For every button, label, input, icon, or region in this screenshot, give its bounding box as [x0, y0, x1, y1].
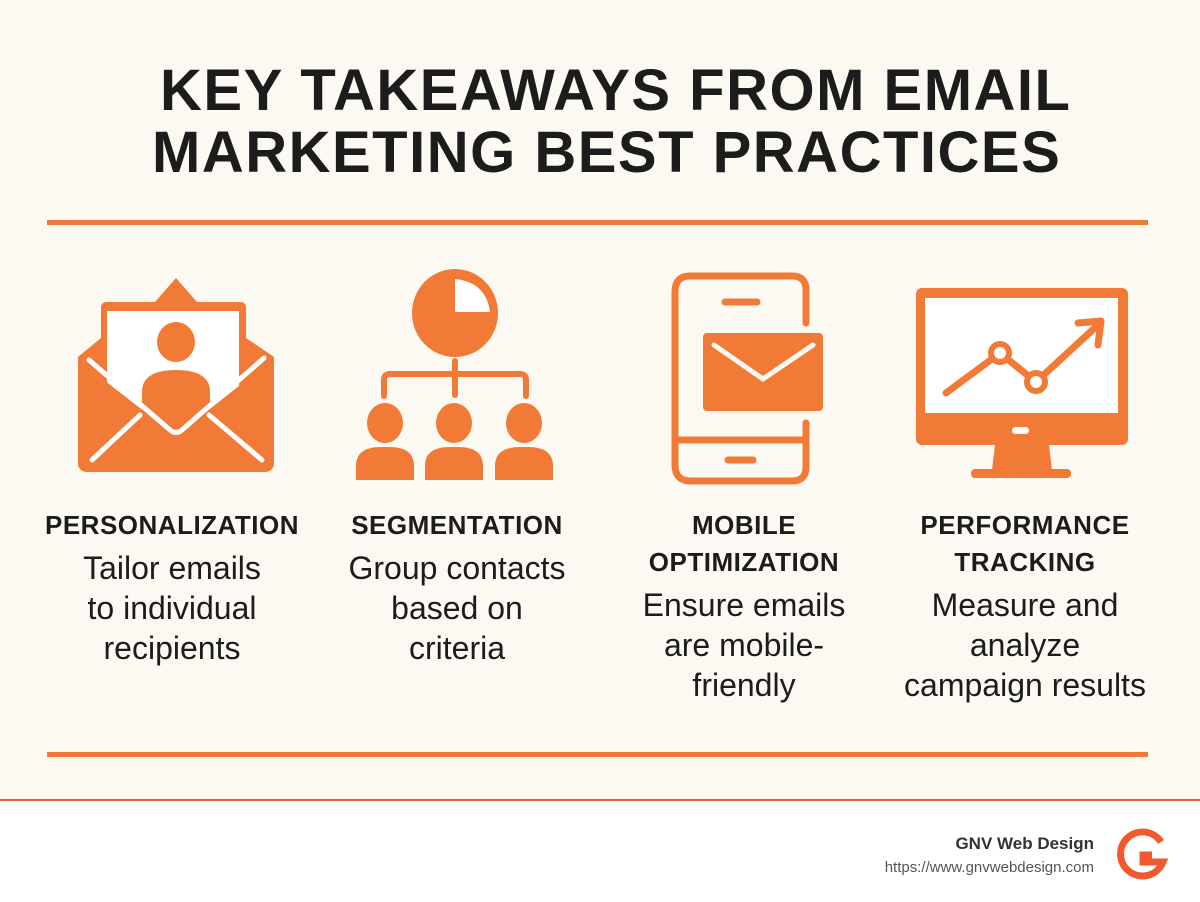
column: performance tracking: campaign results: [904, 667, 1146, 703]
footer divider: [0, 799, 1200, 801]
icon: mobile phone with envelope: [675, 276, 823, 481]
footer brand: [885, 834, 1094, 876]
column: performance tracking: Measure and: [932, 587, 1118, 623]
column: segmentation: [348, 510, 566, 666]
column: segmentation: SEGMENTATION: [351, 510, 563, 540]
column: segmentation: criteria: [409, 630, 505, 666]
column: personalization: PERSONALIZATION: [45, 510, 299, 540]
column: segmentation: Group contacts: [348, 550, 566, 586]
column: mobile optimization: are mobile-: [664, 627, 824, 663]
title: KEY TAKEAWAYS FROM EMAIL: [160, 58, 1071, 123]
column: personalization: Tailor emails: [83, 550, 261, 586]
column: performance tracking: [904, 510, 1146, 703]
column: personalization: recipients: [104, 630, 240, 666]
column: performance tracking: TRACKING: [954, 547, 1096, 577]
column: personalization: [45, 510, 299, 666]
footer brand: GNV Web Design: [955, 834, 1094, 853]
logo: [1117, 828, 1168, 880]
footer brand: https://www.gnvwebdesign.com: [885, 859, 1094, 876]
column: performance tracking: PERFORMANCE: [920, 510, 1130, 540]
column: mobile optimization: MOBILE: [692, 510, 796, 540]
column: performance tracking: analyze: [970, 627, 1080, 663]
column: mobile optimization: OPTIMIZATION: [649, 547, 839, 577]
icon: monitor with chart: [916, 288, 1128, 478]
title: [152, 58, 1071, 185]
column: personalization: to individual: [88, 590, 256, 626]
icon: segmentation: [356, 269, 553, 480]
title: MARKETING BEST PRACTICES: [152, 120, 1061, 185]
icon: envelope with person: [78, 278, 274, 472]
column: segmentation: based on: [391, 590, 523, 626]
column: mobile optimization: Ensure emails: [643, 587, 845, 623]
column: mobile optimization: friendly: [692, 667, 796, 703]
column: mobile optimization: [643, 510, 845, 703]
